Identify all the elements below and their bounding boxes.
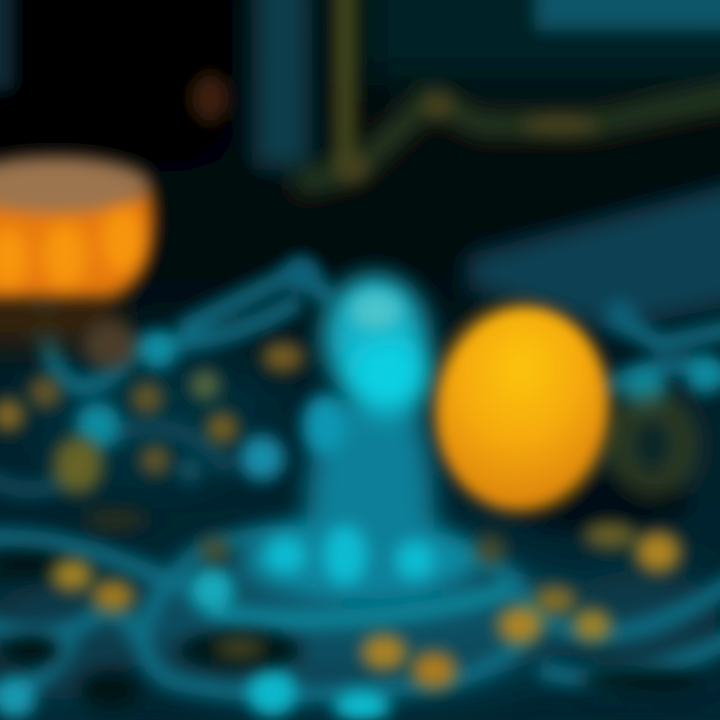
teal network	[0, 270, 720, 700]
network nodes	[0, 257, 720, 720]
cyan figure	[240, 275, 480, 598]
right blue panel	[465, 175, 720, 330]
orange tints on chart	[336, 93, 600, 182]
drum body	[0, 190, 153, 297]
gold specks	[0, 321, 680, 688]
golden egg	[427, 300, 617, 516]
figure body	[307, 400, 434, 590]
egg glow	[434, 304, 610, 512]
left edge sliver	[0, 0, 14, 90]
figure base glow	[240, 522, 480, 598]
drum highlights	[0, 208, 142, 288]
upper right dark panel glow	[0, 0, 720, 150]
figure bright base spots	[265, 525, 435, 585]
figure bright chest	[346, 335, 430, 415]
figure left arm	[303, 395, 347, 455]
small orange glow	[192, 74, 228, 122]
drum top	[0, 157, 150, 213]
figure head	[323, 275, 427, 395]
olive line chart	[295, 90, 720, 185]
vertical column: olive	[334, 0, 356, 170]
drum shadow	[0, 295, 120, 345]
figure head highlight	[350, 290, 402, 330]
orange drum	[0, 157, 153, 345]
dark gaps in the network	[0, 470, 700, 710]
lower teal glows	[0, 350, 720, 700]
gold ring right of egg	[620, 405, 684, 485]
top right cyan bar	[535, 0, 720, 30]
vertical column: teal	[252, 0, 312, 170]
egg body	[427, 300, 617, 516]
